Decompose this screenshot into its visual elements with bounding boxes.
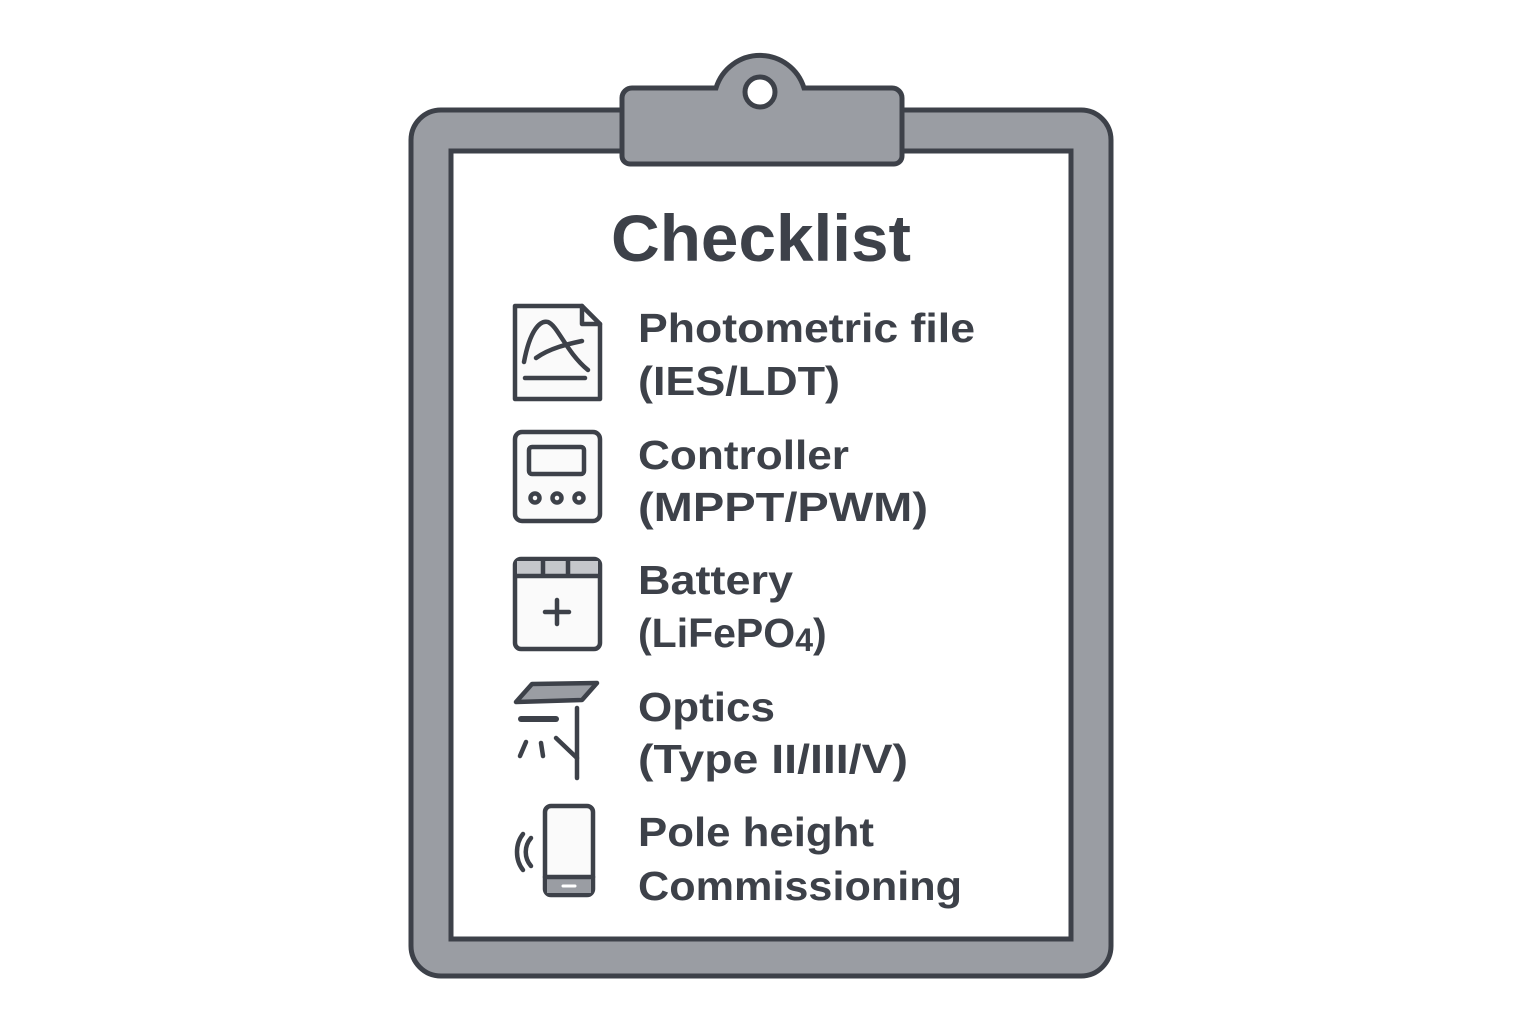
text: battery: Battery [638, 557, 793, 603]
text: Commissioning [638, 863, 962, 909]
text: (MPPT/PWM) [638, 484, 928, 530]
text: (IES/LDT) [638, 358, 840, 404]
icon: battery [515, 559, 600, 649]
icon: controller [515, 432, 600, 521]
text: photometric file: Photometric file [638, 305, 975, 351]
icon: optics solar street light [516, 683, 597, 778]
title: Checklist [611, 201, 911, 275]
icon: phone [517, 806, 593, 895]
paper [451, 151, 1071, 939]
text: (LiFePO [638, 610, 795, 656]
icon: photometric file [515, 306, 600, 399]
text: controller: Controller [638, 432, 849, 478]
text: 4 [795, 622, 813, 658]
text: optics: Optics [638, 684, 775, 730]
text: ) [813, 610, 827, 656]
text: pole height commissioning: Pole height [638, 809, 874, 855]
clipboard board [411, 110, 1111, 976]
text: (Type II/III/V) [638, 736, 908, 782]
clip [622, 55, 902, 164]
